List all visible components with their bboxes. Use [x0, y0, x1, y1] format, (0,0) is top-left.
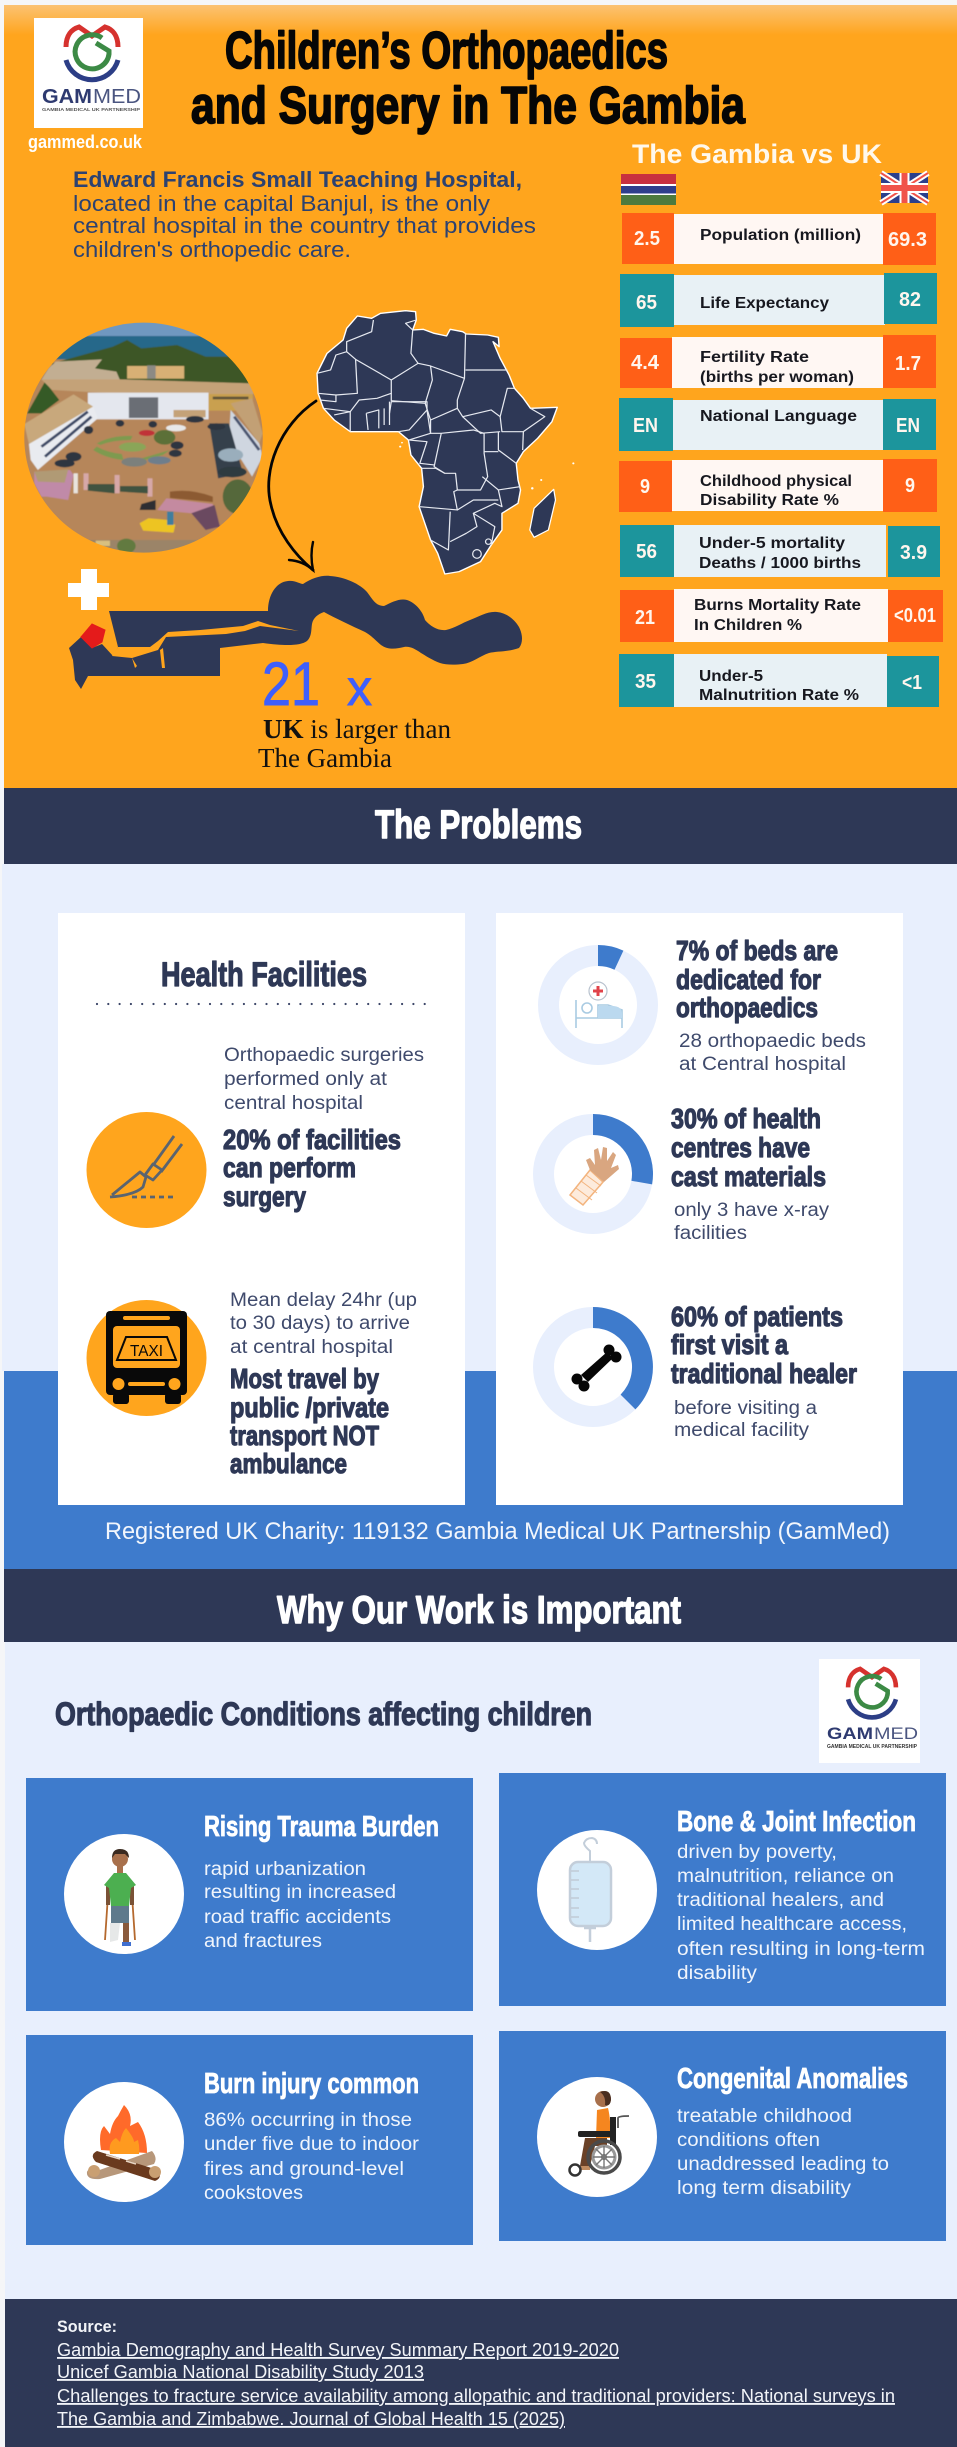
row: fertility rate: 1.7 [895, 353, 921, 375]
row: population: 2.5 [634, 228, 660, 250]
row: under-5 mortality: 3.9 [900, 542, 927, 564]
callout: 21 x: 21 [262, 650, 320, 718]
text: bone and joint: driven by poverty, [677, 1842, 837, 1863]
text: bone and joint: often resulting in long-term [677, 1939, 925, 1960]
banner: Why Our Work is Important [4, 1569, 957, 1642]
row: life expectancy: 82 [899, 289, 921, 311]
row: malnutrition: <1 [902, 672, 922, 694]
row: burns mortality [620, 589, 943, 642]
row: fertility rate: (births per woman) [700, 369, 854, 386]
row: under-5 mortality [620, 525, 940, 577]
logo: GamMed small: GAMBIA MEDICAL UK PARTNERSHIP [827, 1744, 918, 1750]
row: malnutrition: 35 [635, 671, 656, 693]
text: rising trauma: rapid urbanization [204, 1859, 366, 1880]
text: mean delay [230, 1290, 417, 1358]
panel: conditions section [5, 1642, 957, 2299]
text: burn injury [204, 2110, 420, 2204]
text: bone and joint: traditional healers, and [677, 1890, 884, 1911]
caption: UK is larger than The Gambia [258, 714, 451, 773]
row: malnutrition [619, 654, 939, 707]
text: x-ray: only 3 have x-ray [674, 1200, 830, 1221]
row: burns mortality: Burns Mortality Rate [694, 597, 861, 614]
row: population [622, 213, 936, 265]
stat: most travel by public transport: ambulance [230, 1448, 347, 1479]
text: 28 beds: 28 orthopaedic beds [679, 1031, 866, 1052]
row: national language: EN [633, 415, 658, 437]
stat: 20% of facilities [223, 1124, 401, 1212]
flag: United Kingdom [881, 173, 928, 203]
text: burn injury: cookstoves [204, 2183, 303, 2204]
icon: campfire [64, 2082, 184, 2202]
hospital intro text: located in the capital Banjul, is the only [73, 191, 490, 216]
heading: Orthopaedic Conditions: Orthopaedic Conditions affecting children [55, 1696, 592, 1732]
caption: UK is larger than The Gambia: The Gambia [258, 743, 392, 773]
callout: 21 x [262, 650, 372, 718]
panel: statistics card [496, 913, 903, 1505]
stat: 30% of health centres: 30% of health [671, 1103, 821, 1134]
icon: IV bag [537, 1830, 657, 1950]
text: congenital anomalies: long term disability [677, 2178, 852, 2199]
text: mean delay: Mean delay 24hr (up [230, 1290, 417, 1311]
panel: sources [5, 2299, 957, 2447]
text: burn injury: under five due to indoor [204, 2134, 420, 2155]
stat: 20% of facilities: surgery [223, 1181, 306, 1212]
row: life expectancy: Life Expectancy [700, 295, 829, 312]
panel: problems background [2, 864, 957, 1569]
card: Burn injury common [26, 2035, 473, 2245]
text: surgery location [224, 1045, 424, 1114]
text: 28 beds [679, 1031, 866, 1075]
comparison table [619, 213, 943, 707]
hospital intro text [73, 167, 536, 262]
text: congenital anomalies [677, 2106, 889, 2199]
card: Bone and Joint Infection [499, 1773, 946, 2006]
icon: white medical cross [68, 569, 109, 610]
row: childhood disability [619, 459, 937, 512]
row: fertility rate [620, 335, 936, 388]
list: references: Unicef Gambia National Disability Study 2013 [57, 2361, 424, 2382]
text: x-ray [674, 1200, 830, 1244]
list: references: Challenges to fracture service availability among allopathic and traditional providers: National surveys in [57, 2385, 895, 2406]
row: life expectancy: 65 [636, 292, 657, 314]
charity registration: Registered UK Charity: 119132 Gambia Medical UK Partnership (GamMed) [105, 1518, 890, 1545]
row: national language [619, 398, 936, 451]
row: burns mortality: In Children % [694, 617, 802, 634]
row: population: 69.3 [888, 229, 927, 251]
stat: 60% of patients: 60% of patients [671, 1301, 843, 1332]
logo: GamMed top: GAM [42, 86, 92, 108]
row: life expectancy [620, 273, 937, 327]
panel: orange header [4, 5, 957, 788]
website: gammed.co.uk [28, 132, 143, 152]
text: before visiting: before visiting a [674, 1398, 817, 1419]
list: references: The Gambia and Zimbabwe. Journal of Global Health 15 (2025) [57, 2408, 565, 2429]
row: burns mortality: 21 [635, 607, 655, 629]
text: before visiting: medical facility [674, 1420, 810, 1441]
logo: GamMed small [819, 1659, 920, 1763]
logo: GamMed small: MED [874, 1724, 918, 1743]
banner: The Problems [4, 788, 957, 864]
stat: 60% of patients: traditional healer [671, 1358, 857, 1389]
stat: 30% of health centres [671, 1103, 826, 1192]
icon: child on crutches [64, 1834, 184, 1954]
row: childhood disability: Childhood physical [700, 473, 852, 490]
heading: Burn injury common: Burn injury common [204, 2068, 419, 2100]
donut: 60% traditional healer [544, 1307, 653, 1416]
arrow: Africa to The Gambia [269, 401, 316, 570]
icon: taxi: TAXI [130, 1343, 163, 1360]
text: rising trauma: and fractures [204, 1931, 322, 1952]
text: bone and joint: disability [677, 1963, 758, 1984]
heading: Health Facilities: Health Facilities [161, 956, 367, 994]
text: mean delay: to 30 days) to arrive [230, 1313, 410, 1334]
stat: most travel by public transport: transport NOT [230, 1420, 379, 1451]
text: congenital anomalies: treatable childhood [677, 2106, 852, 2127]
text: bone and joint: malnutrition, reliance on [677, 1866, 894, 1887]
photo: hospital aerial view [20, 320, 270, 557]
row: under-5 mortality: Under-5 mortality [699, 535, 845, 552]
donut: 7% of beds [548, 945, 648, 1054]
row: under-5 mortality: Deaths / 1000 births [699, 555, 861, 572]
text: x-ray: facilities [674, 1223, 747, 1244]
banner: The Problems: The Problems [375, 803, 582, 847]
text: burn injury: fires and ground-level [204, 2159, 404, 2180]
title: Children’s Orthopaedics [225, 22, 668, 80]
text: 28 beds: at Central hospital [679, 1054, 846, 1075]
row: malnutrition: Malnutrition Rate % [699, 687, 859, 704]
text: surgery location: Orthopaedic surgeries [224, 1045, 424, 1066]
icon: scalpel [86, 1112, 206, 1228]
stat: most travel by public transport [230, 1363, 389, 1479]
heading: Rising Trauma Burden: Rising Trauma Burden [204, 1811, 439, 1843]
label: Source: Source: [57, 2317, 117, 2336]
panel: Health Facilities card [58, 913, 465, 1505]
list: references: Gambia Demography and Health Survey Summary Report 2019-2020 [57, 2339, 619, 2360]
list: references [57, 2339, 895, 2429]
row: malnutrition: Under-5 [699, 668, 763, 685]
stat: 7% of beds: 7% of beds are [676, 935, 838, 966]
callout: 21 x: x [347, 660, 372, 716]
text: surgery location: central hospital [224, 1093, 363, 1114]
row: fertility rate: 4.4 [631, 352, 660, 374]
card: Rising Trauma Burden [26, 1778, 473, 2011]
map: The Gambia [69, 576, 522, 689]
stat: 7% of beds: dedicated for [676, 964, 821, 995]
text: burn injury: 86% occurring in those [204, 2110, 412, 2131]
row: population: Population (million) [700, 227, 861, 244]
donut: 30% cast materials [544, 1114, 653, 1224]
caption: UK is larger than The Gambia: UK is larger than [263, 714, 451, 744]
stat: most travel by public transport: public /private [230, 1392, 389, 1423]
stat: 60% of patients: first visit a [671, 1329, 788, 1360]
stat: 30% of health centres: centres have [671, 1132, 810, 1163]
text: surgery location: performed only at [224, 1069, 388, 1090]
icon: taxi [86, 1300, 206, 1416]
text: bone and joint: limited healthcare access, [677, 1914, 907, 1935]
row: national language: EN [896, 415, 920, 437]
stat: 7% of beds [676, 935, 838, 1023]
logo: GamMed top: GAMBIA MEDICAL UK PARTNERSHIP [42, 107, 140, 112]
row: under-5 mortality: 56 [636, 541, 657, 563]
stat: 30% of health centres: cast materials [671, 1161, 826, 1192]
hospital intro text: Edward Francis Small Teaching Hospital, [73, 167, 522, 192]
row: burns mortality: <0.01 [894, 605, 936, 627]
row: childhood disability: Disability Rate % [700, 492, 839, 509]
title [191, 22, 746, 135]
text: bone and joint [677, 1842, 925, 1984]
icon: wheelchair user [537, 2077, 657, 2197]
heading: The Gambia vs UK: The Gambia vs UK [632, 139, 883, 169]
text: mean delay: at central hospital [230, 1337, 393, 1358]
hospital intro text: central hospital in the country that provides [73, 213, 536, 238]
row: fertility rate: Fertility Rate [700, 349, 809, 366]
text: rising trauma [204, 1859, 396, 1952]
stat: 7% of beds: orthopaedics [676, 992, 818, 1023]
text: rising trauma: road traffic accidents [204, 1907, 391, 1928]
text: congenital anomalies: unaddressed leading to [677, 2154, 889, 2175]
row: childhood disability: 9 [905, 475, 915, 497]
text: congenital anomalies: conditions often [677, 2130, 820, 2151]
stat: 60% of patients [671, 1301, 857, 1389]
stat: most travel by public transport: Most travel by [230, 1363, 379, 1394]
logo: GamMed top [34, 18, 143, 128]
card: Congenital Anomalies [499, 2031, 946, 2241]
stat: 20% of facilities: 20% of facilities [223, 1124, 401, 1155]
logo: GamMed top: MED [93, 86, 141, 108]
banner: Why Our Work is Important: Why Our Work is Important [277, 1589, 681, 1632]
stat: 20% of facilities: can perform [223, 1152, 356, 1183]
text: before visiting [674, 1398, 817, 1441]
hospital intro text: children's orthopedic care. [73, 237, 351, 262]
logo: GamMed small: GAM [827, 1724, 873, 1743]
row: national language: National Language [700, 408, 857, 425]
flag: The Gambia [621, 174, 676, 205]
text: rising trauma: resulting in increased [204, 1882, 396, 1903]
row: childhood disability: 9 [640, 476, 650, 498]
title: and Surgery in The Gambia [191, 77, 746, 135]
map: Africa [317, 311, 574, 574]
